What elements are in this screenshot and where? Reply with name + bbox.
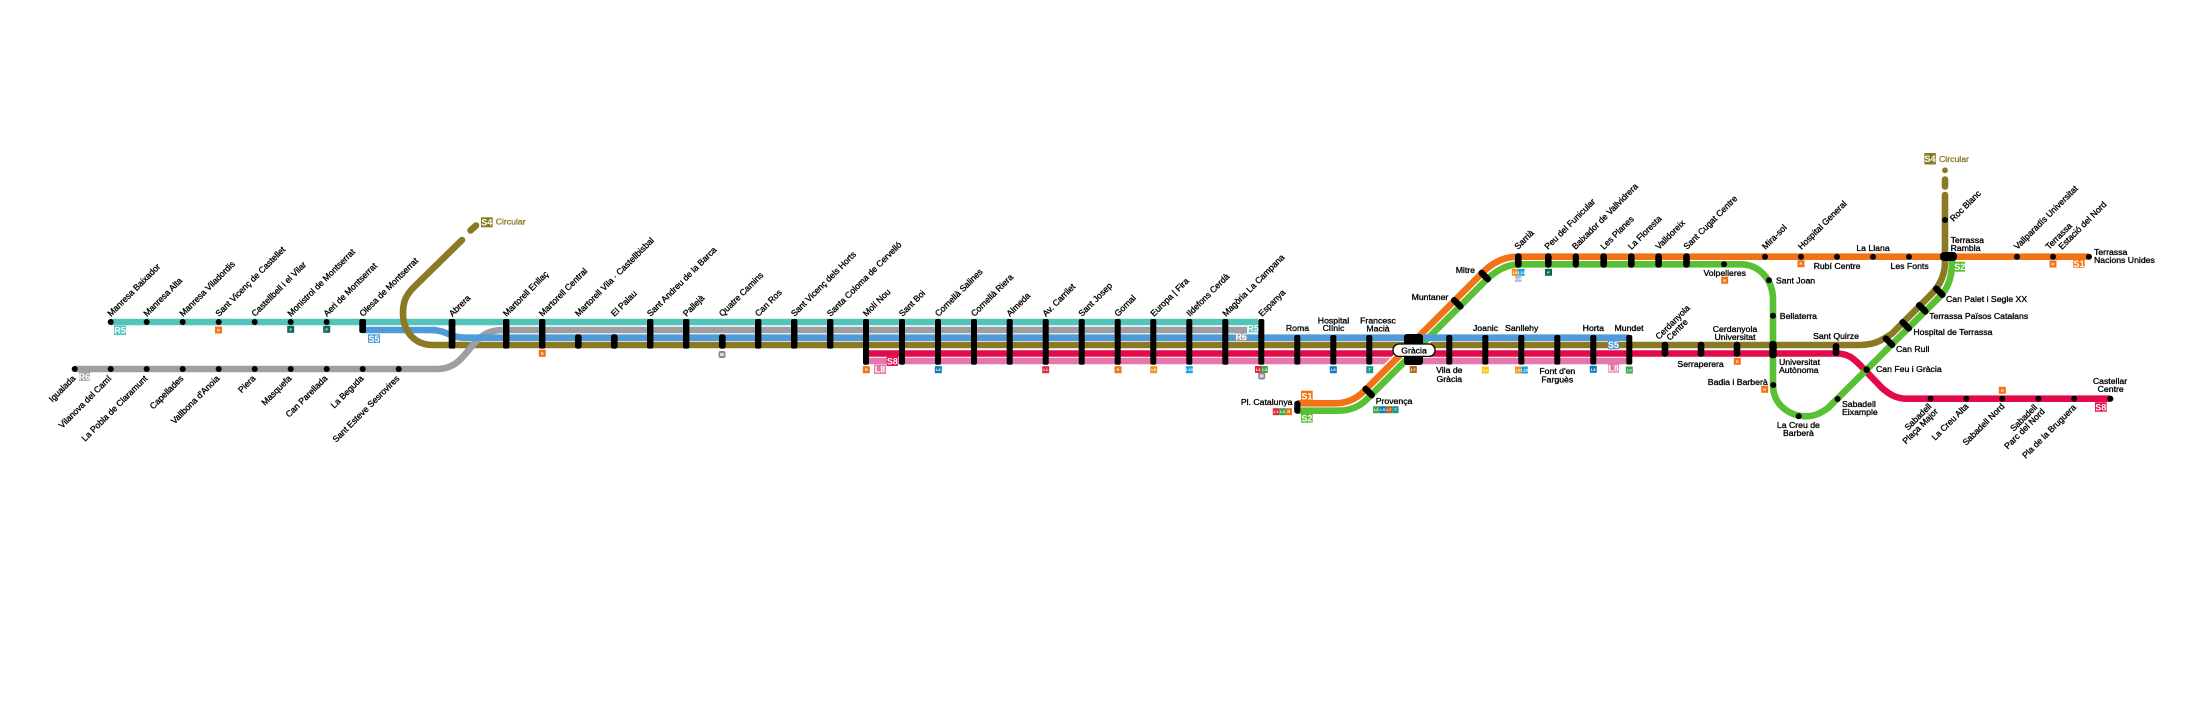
station names: east horizontal: Castellar <box>2093 376 2127 386</box>
station names: S1 and S2 rotated <box>1512 181 2109 251</box>
connection tags: L1 <box>1043 367 1049 372</box>
station names: central horizontal <box>1241 265 1644 407</box>
station names: central horizontal: Gràcia <box>1437 374 1462 384</box>
station names: rotated upper, west: Cornellà Riera <box>969 272 1015 318</box>
station: Gràcia interchange <box>1393 334 1435 365</box>
station names: rotated upper, west: Pallejà <box>681 293 706 318</box>
connection tags: L7 <box>1411 367 1416 372</box>
station names: east horizontal: Serraperera <box>1677 359 1724 369</box>
line badges: S1 <box>2073 259 2085 269</box>
station names: rotated upper, west: Gornal <box>1112 293 1138 318</box>
station names: rotated lower, R6 branch: Masquefa <box>259 373 294 407</box>
line: R5 teal <box>111 319 1258 325</box>
line badges: S8 <box>2095 402 2106 412</box>
station names: rotated upper, west: Ildefons Cerdà <box>1184 271 1231 318</box>
station names: rotated upper, west: Martorell Central <box>537 266 589 318</box>
station names: east horizontal: Terrassa <box>2094 247 2127 257</box>
station names: S1 and S2 rotated: Vallparadís Universitat <box>2012 183 2080 251</box>
station names: east horizontal: Barberà <box>1783 428 1814 438</box>
connection tags: L7 <box>1387 407 1392 412</box>
station names: rotated upper, west: Europa | Fira <box>1148 276 1191 318</box>
station names: S8 rotated <box>1900 401 2078 460</box>
station names: rotated upper, west: Santa Coloma de Cervelló <box>825 240 904 318</box>
station names: rotated upper, west: Molí Nou <box>861 287 893 318</box>
line: S2 green <box>1297 258 1952 416</box>
station names: rotated upper, west: Manresa Viladordis <box>177 258 237 318</box>
station names: rotated upper, west: El Palau <box>609 288 639 318</box>
station names: S1 and S2 rotated: Sant Cugat Centre <box>1681 193 1739 251</box>
station names: central horizontal: Hospital <box>1318 315 1349 325</box>
station names: rotated upper, west: Sant Vicenç de Castellet <box>213 244 288 318</box>
line: S1 orange <box>1297 257 2089 403</box>
line badges: S2 <box>1301 413 1312 423</box>
connection tags: L3 <box>1627 368 1632 372</box>
connection tags: R <box>2052 262 2055 266</box>
station names: S1 and S2 rotated: Roc Blanc <box>1948 188 1983 223</box>
connection tags: L9 <box>1516 368 1521 372</box>
connection tags: F <box>325 327 328 332</box>
station names: central horizontal: Vila de <box>1436 365 1463 375</box>
station names: S8 rotated: Plaça Major <box>1900 406 1940 446</box>
line badges: S1 <box>1301 392 1312 402</box>
station names: S8 rotated: Pla de la Bruguera <box>2020 402 2078 460</box>
station names: east horizontal: La Llana <box>1856 243 1890 253</box>
connection tags: L10 <box>1186 367 1194 372</box>
station names: east horizontal: Sabadell <box>1842 399 1876 409</box>
station names: east horizontal: Can Feu i Gràcia <box>1876 364 1942 374</box>
station names: S8 rotated: Sabadell <box>1902 401 1933 432</box>
line badges: S5 <box>1608 340 1619 350</box>
station names: east horizontal: Rambla <box>1951 243 1981 253</box>
station names: rotated upper, west: Martorell Vila · Castellbisbal <box>573 235 656 318</box>
line badges: R5 <box>1247 324 1259 334</box>
connection tags: R <box>865 367 868 372</box>
station names: east horizontal: Autònoma <box>1779 365 1819 375</box>
station names: east horizontal: Rubí Centre <box>1814 261 1861 271</box>
station names: rotated lower, R6 branch <box>47 373 402 444</box>
stations: small dots <box>72 217 2113 419</box>
station names: east horizontal: Sant Quirze <box>1813 331 1859 341</box>
station names: S1 and S2 rotated: Baixador de Vallvidrera <box>1570 181 1640 251</box>
line: L8 pink <box>866 358 1629 364</box>
station names: rotated lower, R6 branch: La Pobla de Claramunt <box>79 373 150 443</box>
label: S4 Circular west: Circular <box>496 216 526 226</box>
connection tags: L3 <box>1262 367 1268 372</box>
connection tags: L5 <box>1380 407 1386 412</box>
line: R6 grey <box>75 330 1247 369</box>
line: S1 orange casing <box>1297 257 1560 403</box>
station names: east horizontal: Can Rull <box>1896 344 1929 354</box>
station names: S1 and S2 rotated: Peu del Funicular <box>1542 196 1597 251</box>
connection tags: L5 <box>1331 367 1336 372</box>
station names: east horizontal: Nacions Unides <box>2094 255 2155 265</box>
connection tags: L9 <box>1513 270 1518 275</box>
station names: east horizontal: Les Fonts <box>1891 261 1929 271</box>
station names: central horizontal: Mundet <box>1615 323 1644 333</box>
line badges: S4 <box>1924 154 1936 164</box>
station names: central horizontal: Provença <box>1376 396 1413 406</box>
line badges: L8 <box>875 365 885 375</box>
station names: rotated lower, R6 branch: Igualada <box>47 373 78 404</box>
station names: rotated upper, west: Magòria La Campana <box>1220 252 1287 318</box>
connection tags: R <box>1117 367 1120 372</box>
station names: rotated lower, R6 branch: Vilanova del Camí <box>57 373 114 430</box>
station names: central horizontal: Horta <box>1583 323 1604 333</box>
line badges: S4 <box>481 217 492 227</box>
station names: central horizontal: Francesc <box>1360 315 1397 325</box>
connection tags: R <box>541 351 544 356</box>
line: S8 crimson <box>866 354 2110 399</box>
station names: rotated upper, west: Manresa Baixador <box>105 261 162 318</box>
connection tags: L4 <box>1483 368 1488 372</box>
station names: central horizontal: Joanic <box>1473 323 1499 333</box>
line: S5 blue main <box>430 330 1629 338</box>
line badges: S2 <box>1954 262 1965 272</box>
station names: rotated upper, west: Aeri de Montserrat <box>321 260 379 318</box>
stations: S1 and S2 pills <box>1294 252 1957 414</box>
station names: east horizontal: Badia i Barberà <box>1708 377 1768 387</box>
connection tags: L10 <box>1518 270 1526 275</box>
connection tags: R <box>1800 261 1803 266</box>
station: Gràcia interchange: Gràcia <box>1401 345 1427 355</box>
station names: rotated upper, west: Can Ros <box>753 287 784 318</box>
station names: S1 and S2 rotated: Hospital General <box>1796 199 1849 251</box>
station names: east horizontal: Cerdanyola <box>1653 303 1692 341</box>
station names: rotated lower, R6 branch: Capellades <box>148 373 186 411</box>
connection tags: R <box>1763 387 1766 392</box>
connection tags: R <box>1723 278 1726 283</box>
line: blue over diagonal <box>1420 334 1450 341</box>
connection tags: L12 <box>1515 276 1523 281</box>
connection tags: L9 <box>1151 367 1157 372</box>
station names: rotated upper, west: Martorell Enllaç <box>501 269 551 318</box>
connection tags: T <box>1368 367 1371 372</box>
station names: east horizontal: Terrassa Països Catalans <box>1929 311 2029 321</box>
station names: S1 and S2 rotated: Sarrià <box>1512 228 1536 251</box>
station names: rotated upper, west: Sant Andreu de la Barca <box>645 245 719 318</box>
station names: rotated upper, west: Manresa Alta <box>141 275 184 318</box>
station names: rotated upper, west <box>105 235 1287 318</box>
connection tags: T <box>1394 407 1397 412</box>
station names: rotated upper, west: Almeda <box>1004 290 1032 318</box>
station names: east horizontal: Centre <box>2098 384 2124 394</box>
connection tags: L1 <box>1256 367 1261 372</box>
station names: east horizontal: Volpelleres <box>1703 268 1747 278</box>
station names: rotated upper, west: Abrera <box>447 293 472 318</box>
station names: rotated lower, R6 branch: Sant Esteve Sesrovires <box>330 373 402 444</box>
station names: east horizontal: Cerdanyola <box>1713 324 1757 334</box>
connection tags: R <box>2001 388 2004 393</box>
line badges <box>79 153 2107 423</box>
station names: east horizontal: Can Palet i Segle XX <box>1946 294 2027 304</box>
station names: east horizontal: Eixample <box>1842 407 1878 417</box>
line badges: R5 <box>114 326 126 336</box>
connection tags: F <box>289 327 292 332</box>
station names: rotated upper, west: Olesa de Montserrat <box>357 255 420 318</box>
station names: S1 and S2 rotated: Mira-sol <box>1760 222 1789 251</box>
station names: central horizontal: Mitre <box>1456 265 1475 275</box>
connection tags: R <box>1736 359 1739 364</box>
connection tags: R <box>217 328 220 332</box>
station names: rotated upper, west: Castellbell i el Vilar <box>249 259 308 318</box>
station names: central horizontal: Clínic <box>1323 323 1345 333</box>
station names: central horizontal: Macià <box>1366 324 1390 334</box>
station names: central horizontal: Farguès <box>1541 374 1574 384</box>
station names: rotated upper, west: Av. Carrilet <box>1040 281 1078 318</box>
station names: S8 rotated: La Creu Alta <box>1930 401 1971 442</box>
connection tags: L8 <box>936 367 941 372</box>
station names: rotated upper, west: Quatre Camins <box>717 270 766 318</box>
station names: S8 rotated: Sabadell Nord <box>1960 401 2007 447</box>
line: S5 blue upper branch <box>362 327 437 333</box>
line badges: S8 <box>887 357 898 367</box>
station names: rotated lower, R6 branch: Vallbona d'Anoia <box>169 373 222 426</box>
station names: east horizontal: La Creu de <box>1777 420 1820 430</box>
station names: rotated lower, R6 branch: Can Parellada <box>283 373 330 419</box>
connection tags: R <box>1287 409 1290 414</box>
station names: east horizontal: Universitat <box>1779 357 1821 367</box>
station names: rotated upper, west: Sant Josep <box>1076 280 1114 318</box>
station names: rotated lower, R6 branch: Piera <box>236 373 258 395</box>
line badges: L8 <box>1608 364 1619 374</box>
station names: east horizontal: Centre <box>1664 317 1690 342</box>
station names: east horizontal: Sant Joan <box>1776 275 1815 285</box>
station names: central horizontal: Pl. Catalunya <box>1241 397 1293 407</box>
station names: S1 and S2 rotated: Les Planes <box>1598 213 1636 251</box>
connection tags: L3 <box>1280 409 1286 414</box>
station names: rotated upper, west: Cornellà Salines <box>933 266 985 318</box>
station names: S1 and S2 rotated: La Floresta <box>1626 213 1664 251</box>
station names: S8 rotated: Parc del Nord <box>2002 406 2047 451</box>
line badges: R6 <box>79 372 90 382</box>
line badges: R6 <box>1235 332 1247 342</box>
station names: east horizontal: Universitat <box>1714 332 1756 342</box>
connection tags: L5 <box>1591 367 1596 372</box>
station names: rotated lower, R6 branch: La Beguda <box>329 373 366 410</box>
label: S4 Circular east: Circular <box>1939 154 1969 164</box>
connection tags: L10 <box>1521 368 1529 372</box>
station names: S8 rotated: Sabadell <box>2008 402 2039 433</box>
line: S2 green casing <box>1297 264 1560 411</box>
station names: east horizontal: Terrassa <box>1951 235 1984 245</box>
station names: rotated upper, west: Monistrol de Montserrat <box>285 246 357 318</box>
station names: central horizontal: Sanllehy <box>1505 323 1539 333</box>
connection tags: L3 <box>1374 407 1379 412</box>
line badges: S5 <box>368 334 380 344</box>
line: S4 olive <box>403 167 1948 345</box>
station names: central horizontal: Muntaner <box>1412 292 1448 302</box>
station names: east horizontal: Bellaterra <box>1780 311 1817 321</box>
connection tags: L1 <box>1274 409 1279 414</box>
station names: east horizontal: Hospital de Terrassa <box>1913 327 1993 337</box>
connection tags <box>215 260 2056 415</box>
station names: rotated upper, west: Sant Boi <box>897 288 927 318</box>
station names: rotated upper, west: Espanya <box>1256 287 1287 318</box>
station names: S1 and S2 rotated: Estació del Nord <box>2056 199 2109 251</box>
station names: east horizontal <box>1653 235 2155 438</box>
station names: rotated upper, west: Sant Vicenç dels Horts <box>789 249 858 318</box>
station names: S1 and S2 rotated: Terrassa <box>2043 221 2074 251</box>
station names: S1 and S2 rotated: Valldoreix <box>1653 217 1687 251</box>
stations: long shared corridor <box>359 319 1839 365</box>
station names: central horizontal: Roma <box>1286 323 1309 333</box>
station names: central horizontal: Font d'en <box>1539 366 1575 376</box>
connection tags: F <box>1547 270 1550 275</box>
